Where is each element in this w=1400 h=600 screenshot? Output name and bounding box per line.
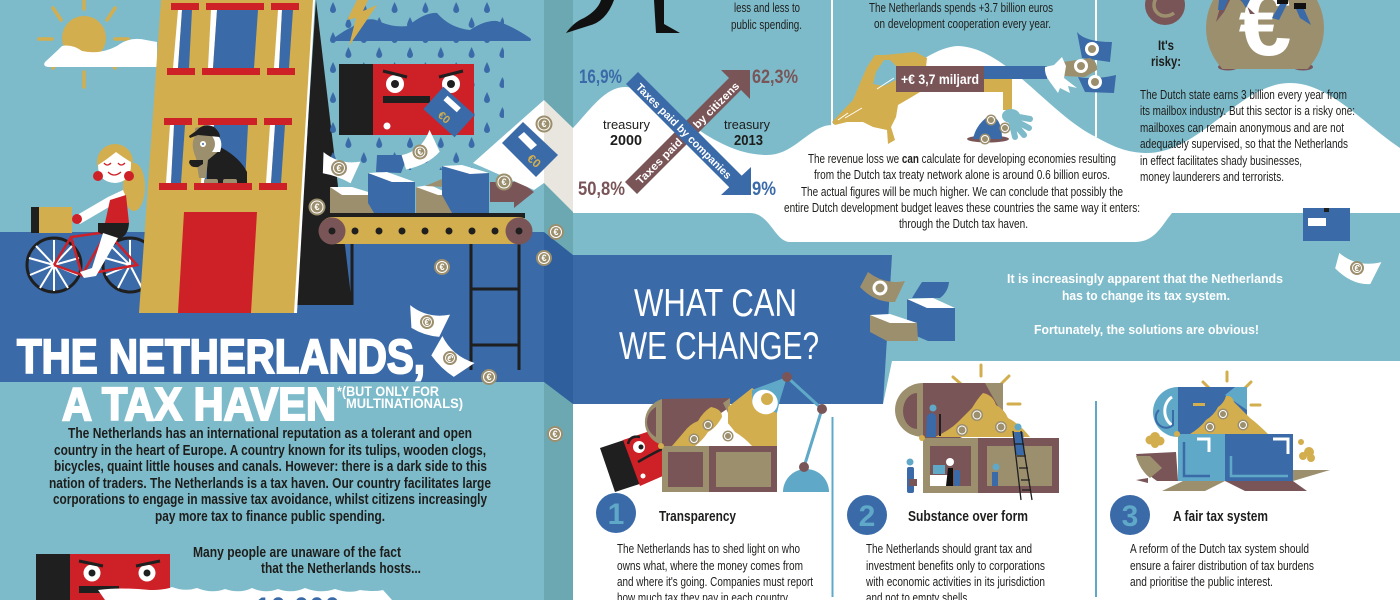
tan box bbox=[870, 314, 918, 341]
rays bbox=[942, 365, 1020, 404]
arrow: taxes paid by companies: Taxes paid by companies bbox=[633, 82, 733, 182]
percentage labels: 62,3% bbox=[752, 67, 798, 88]
boxes bbox=[330, 155, 489, 213]
icon: tilted envelope bbox=[502, 122, 558, 177]
envelope in mouth: €0 bbox=[435, 109, 452, 127]
lid bbox=[645, 399, 662, 445]
body text: with economic activities in its jurisdiction bbox=[865, 575, 1045, 589]
text: change the tax system bbox=[1007, 271, 1283, 337]
number badge 2: 2 bbox=[859, 500, 875, 533]
euro coins: € bbox=[439, 262, 445, 272]
arrow: taxes paid by citizens: by citizens bbox=[691, 80, 742, 131]
body text bbox=[1130, 542, 1314, 589]
hand through hole bbox=[967, 78, 1030, 144]
text: it's risky: risky: bbox=[1151, 53, 1181, 69]
flying bank notes bbox=[319, 130, 1381, 382]
icon: chest with lamp and red mailbox bbox=[600, 372, 829, 492]
flying bank notes: € bbox=[424, 317, 430, 327]
text: it's risky: mailboxes can remain anonymous and are not bbox=[1140, 121, 1344, 135]
flying bank notes: € bbox=[445, 353, 455, 363]
icon: tilted envelope: €0 bbox=[524, 151, 544, 171]
body text: The Netherlands has to shed light on who bbox=[617, 542, 800, 556]
flying bank notes: € bbox=[416, 146, 424, 158]
intro paragraph: bicycles, quaint little houses and canals. However: there is a dark side to this bbox=[54, 459, 487, 475]
intro paragraph: nation of traders. The Netherlands is a tax haven. Our country facilitates large bbox=[49, 476, 491, 492]
banner: what can we change: WHAT CAN bbox=[634, 282, 797, 325]
chest base bbox=[1178, 434, 1225, 481]
number badge 3: 3 bbox=[1122, 500, 1138, 533]
intro paragraph: pay more tax to finance public spending. bbox=[155, 509, 385, 525]
text: revenue loss: from the Dutch tax treaty network alone is around 0.6 billion euros. bbox=[814, 168, 1110, 182]
text: revenue loss: entire Dutch development budget leaves these countries the same way it enters: bbox=[784, 201, 1140, 215]
chart: crossed arrows treasury 2000 vs 2013 bbox=[578, 67, 798, 200]
text: revenue loss bbox=[784, 152, 1140, 231]
conveyor legs and ladder bbox=[332, 240, 519, 370]
intro paragraph: The Netherlands has an international reputation as a tolerant and open bbox=[68, 426, 472, 442]
text: public spending: less and less to bbox=[734, 1, 800, 15]
rain bbox=[328, 0, 504, 170]
white glove bbox=[1045, 57, 1077, 93]
body text: ensure a fairer distribution of tax burdens bbox=[1130, 559, 1314, 573]
icon: chest with office workers bbox=[895, 365, 1059, 500]
text: revenue loss: The actual figures will be much higher. We can conclude that possibly the bbox=[801, 185, 1123, 199]
chest base bbox=[923, 438, 978, 493]
text: it's risky: It's bbox=[1158, 37, 1174, 53]
euro coins: € bbox=[486, 372, 492, 382]
page fold bbox=[544, 0, 573, 600]
text: revenue loss: The revenue loss we can calculate for developing economies resulting bbox=[808, 152, 1116, 166]
coin blobs bbox=[1146, 432, 1315, 462]
bicycle frame bbox=[54, 232, 137, 275]
number badge 2 bbox=[847, 495, 887, 535]
heading: substance over form: Substance over form bbox=[908, 509, 1028, 525]
flying bank notes: € bbox=[336, 163, 342, 173]
mailbox intro text: Many people are unaware of the fact bbox=[193, 545, 401, 561]
white envelope backdrop bbox=[473, 100, 544, 190]
icon: angry red mailbox at bottom bbox=[36, 554, 170, 600]
panel: 1 transparency bbox=[596, 372, 829, 600]
icon: money bag with euro bbox=[1207, 0, 1323, 76]
basket bbox=[31, 207, 72, 233]
number badge 1: 1 bbox=[608, 498, 624, 531]
title: THE NETHERLANDS, bbox=[17, 331, 425, 384]
title bbox=[17, 331, 463, 430]
column dividers lower bbox=[832, 401, 1096, 597]
door bbox=[178, 212, 257, 313]
body text: A reform of the Dutch tax system should bbox=[1130, 542, 1309, 556]
text: public spending bbox=[731, 1, 802, 32]
flying bank notes: € bbox=[1353, 263, 1361, 273]
upper windows bbox=[167, 3, 299, 75]
black shape behind building bbox=[296, 0, 352, 305]
coin pile bbox=[1190, 396, 1268, 434]
lid bbox=[895, 383, 923, 437]
lower windows bbox=[166, 125, 285, 183]
text: change the tax system: Fortunately, the solutions are obvious! bbox=[1034, 322, 1259, 337]
coin pile bbox=[935, 393, 1030, 437]
euro coins: € bbox=[541, 119, 547, 129]
treasury labels: 2000 bbox=[610, 133, 642, 149]
map: Netherlands with money flow bbox=[832, 32, 1116, 144]
intro paragraph: corporations to engage in massive tax avoidance, whilst citizens increasingly bbox=[53, 492, 487, 508]
text: public spending: public spending. bbox=[731, 18, 802, 32]
heading: transparency: Transparency bbox=[659, 509, 736, 525]
icon: sun and cloud bbox=[39, 0, 157, 87]
body text: owns what, where the money comes from bbox=[617, 559, 803, 573]
panel: 3 a fair tax system bbox=[1110, 372, 1330, 589]
lid bbox=[1153, 387, 1178, 437]
bicycle wheels bbox=[27, 238, 157, 292]
icon: boxes beside banner bbox=[860, 272, 955, 341]
treasury labels: treasury bbox=[724, 117, 770, 132]
euro coins: € bbox=[501, 177, 507, 187]
ladder bbox=[1013, 431, 1032, 500]
icon: blue mailbox bbox=[1303, 208, 1350, 241]
panel: building bbox=[139, 0, 315, 313]
chest base bbox=[662, 446, 709, 492]
icon: angry red mailbox eating envelope bbox=[339, 64, 475, 137]
icon: open chest bbox=[1136, 372, 1330, 491]
euro coins: € bbox=[541, 253, 547, 263]
blue box bbox=[907, 282, 955, 341]
panel: conveyor belt with boxes bbox=[318, 155, 534, 370]
text: development cooperation bbox=[869, 1, 1053, 31]
desk lamp bbox=[748, 372, 829, 492]
coin piles bbox=[672, 407, 730, 446]
rays bbox=[1193, 372, 1260, 405]
percentage labels: 50,8% bbox=[578, 179, 625, 200]
intro paragraph bbox=[49, 426, 491, 525]
person legs at page top bbox=[566, 0, 680, 33]
banner: what can we change: WE CHANGE? bbox=[619, 325, 819, 368]
panel: white hills background bbox=[573, 46, 1400, 242]
arrow bbox=[490, 177, 534, 208]
man smoking pipe in window bbox=[189, 125, 247, 187]
treasury labels: 2013 bbox=[734, 133, 763, 149]
panel: blue ground band bbox=[0, 232, 545, 382]
text: revenue loss: through the Dutch tax haven. bbox=[899, 217, 1028, 231]
text: it's risky: money launderers and terrorists. bbox=[1140, 170, 1284, 184]
euro coins: € bbox=[314, 202, 320, 212]
text: it's risky: in effect facilitates shady businesses, bbox=[1140, 154, 1302, 168]
people bbox=[906, 404, 1025, 493]
text: it's risky: The Dutch state earns 3 billion every year from bbox=[1140, 88, 1347, 102]
arrow: taxes paid by citizens bbox=[631, 70, 750, 188]
icon: woman on bicycle bbox=[27, 144, 157, 292]
text: it's risky: adequately supervised, so that the Netherlands bbox=[1140, 137, 1348, 151]
percentage labels: 16,9% bbox=[579, 67, 622, 88]
intro paragraph: country in the heart of Europe. A country known for its tulips, wooden clogs, bbox=[54, 443, 486, 459]
body text: investment benefits only to corporations bbox=[866, 559, 1045, 573]
banner: what can we change bbox=[573, 255, 892, 404]
title: A TAX HAVEN bbox=[62, 378, 336, 430]
white wavy banner with number bbox=[98, 587, 392, 600]
broken ground shadows bbox=[1136, 452, 1178, 481]
blue arm bbox=[984, 66, 1047, 79]
arrow: taxes paid by citizens: Taxes paid bbox=[634, 136, 685, 187]
body text: and prioritise the public interest. bbox=[1130, 575, 1273, 589]
treasury labels bbox=[603, 117, 770, 149]
icon: brown coin bbox=[1145, 0, 1185, 25]
tan bank note with coin bbox=[860, 272, 905, 302]
label: +€ 3,7 miljard bbox=[896, 66, 984, 92]
treasury labels: treasury bbox=[603, 117, 650, 132]
body text: The Netherlands should grant tax and bbox=[866, 542, 1032, 556]
rider bbox=[72, 144, 145, 278]
column dividers bbox=[832, 0, 1096, 137]
text: development cooperation: The Netherlands spends +3.7 billion euros bbox=[869, 1, 1053, 15]
label: +€ 3,7 miljard: +€ 3,7 miljard bbox=[901, 71, 979, 87]
percentage labels bbox=[578, 67, 798, 200]
text: change the tax system: It is increasingly apparent that the Netherlands bbox=[1007, 271, 1283, 286]
euro coins: € bbox=[552, 429, 558, 439]
percentage labels: 9% bbox=[752, 179, 776, 200]
title: *(BUT ONLY FOR bbox=[337, 383, 439, 399]
lamp beam bbox=[728, 388, 777, 446]
bank notes in hand bbox=[1063, 32, 1116, 93]
icon: storm cloud bbox=[334, 0, 531, 46]
text: it's risky bbox=[1140, 37, 1355, 184]
euro coins: € bbox=[553, 227, 559, 237]
euro coins bbox=[308, 116, 564, 442]
panel: white lower page bbox=[573, 361, 1400, 600]
heading: a fair tax system: A fair tax system bbox=[1173, 509, 1268, 525]
body text bbox=[617, 542, 813, 600]
mailbox intro text bbox=[193, 545, 421, 577]
red mailbox bbox=[600, 427, 672, 492]
body text bbox=[865, 542, 1045, 600]
number badge 3 bbox=[1110, 495, 1150, 535]
text: change the tax system: has to change its tax system. bbox=[1062, 288, 1230, 303]
number badge 1 bbox=[596, 493, 636, 533]
mailbox intro text: that the Netherlands hosts... bbox=[261, 561, 421, 577]
body text: and where it's going. Companies must report bbox=[617, 575, 813, 589]
title: MULTINATIONALS) bbox=[346, 395, 463, 411]
text: development cooperation: on development cooperation every year. bbox=[874, 17, 1051, 31]
panel: 2 substance over form bbox=[847, 365, 1059, 600]
